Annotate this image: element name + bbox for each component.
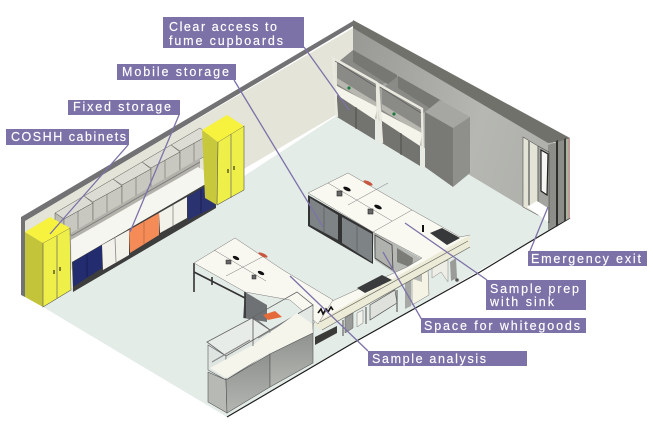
label: sample analysis [368, 351, 527, 366]
label: clear access to fume cupboards: Clear access to [169, 20, 277, 34]
glass enclosure 2 [253, 292, 313, 387]
leader: sample analysis [290, 276, 368, 351]
label: sample prep with sink: Sample prep [490, 282, 579, 296]
floor edge [227, 218, 570, 417]
hob [357, 275, 392, 293]
wall cabinets [55, 128, 209, 238]
sink [430, 228, 460, 245]
sample analysis bench [194, 238, 333, 324]
label: mobile storage: Mobile storage [122, 65, 229, 79]
leader: mobile storage [234, 80, 323, 227]
label: sample prep with sink: with sink [489, 295, 555, 309]
balance mark [318, 307, 333, 314]
tap [422, 225, 424, 232]
left wall [21, 21, 353, 297]
label: COSHH cabinets: COSHH cabinets [11, 130, 126, 144]
leader: fume cupboards [304, 47, 349, 110]
fume cupboard 2 [378, 76, 442, 168]
glass enclosure 1 [207, 318, 270, 413]
leader: fixed storage [130, 115, 179, 232]
label: space for whitegoods: Space for whitegoods [424, 319, 580, 333]
leader: whitegoods [383, 252, 422, 320]
base cabinets [72, 178, 216, 292]
label: sample analysis: Sample analysis [372, 352, 486, 366]
right central bench front [308, 195, 422, 282]
label: fixed storage: Fixed storage [73, 100, 171, 114]
wall rail [71, 158, 200, 240]
floor [43, 105, 570, 417]
right central bench top [308, 173, 470, 326]
label: clear access to fume cupboards [163, 17, 304, 48]
label: emergency exit: Emergency exit [531, 252, 642, 266]
long bench base units [315, 258, 459, 345]
fume cupboard 1 [333, 50, 397, 142]
door: emergency exit [523, 137, 549, 223]
bench fittings [337, 179, 382, 214]
right wall [353, 20, 570, 230]
leader: sample prep [405, 223, 487, 280]
leader: COSHH cabinets [50, 145, 128, 234]
right yellow COSHH cabinet [202, 115, 244, 205]
tall grey cabinet [425, 100, 470, 187]
long bench rail [313, 235, 470, 330]
label: clear access to fume cupboards: fume cupboards [169, 34, 283, 48]
leader: emergency exit [530, 207, 548, 251]
label: sample prep with sink [486, 280, 586, 310]
left yellow COSHH cabinet [25, 217, 71, 307]
worktop [71, 167, 216, 262]
